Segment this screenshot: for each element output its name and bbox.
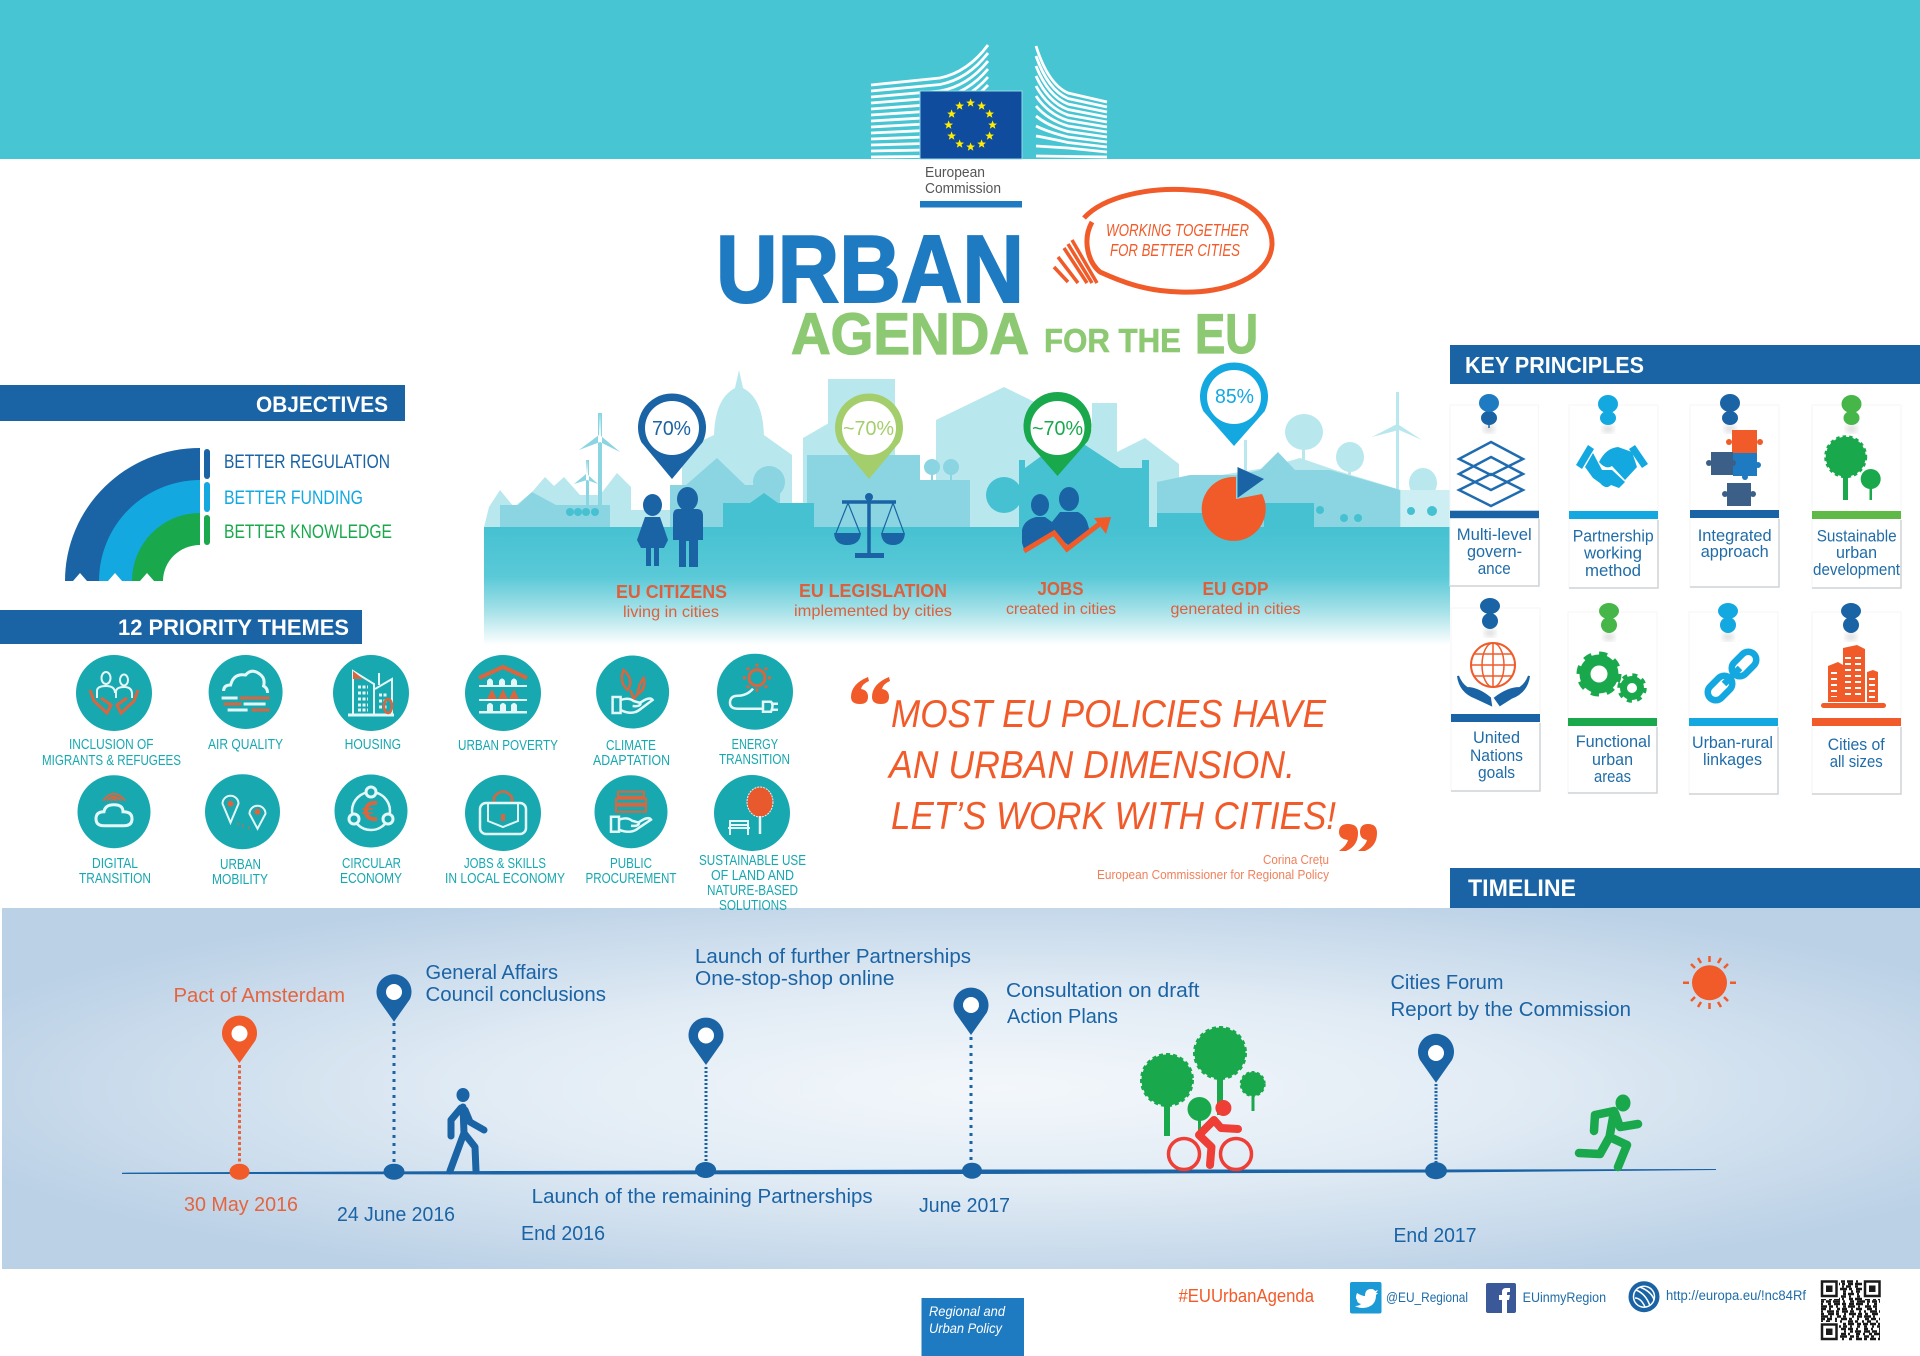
milestone: Pact of Amsterdam: 30 May 2016 bbox=[184, 1193, 298, 1216]
footer: website bbox=[1628, 1281, 1806, 1312]
panel: key principles bbox=[1450, 345, 1920, 794]
card: integrated approach: approach bbox=[1701, 542, 1769, 561]
stat: EU citizens bbox=[616, 393, 727, 621]
footer: facebook: EUinmyRegion bbox=[1523, 1289, 1606, 1305]
card: partnership working method: method bbox=[1585, 561, 1641, 580]
panel: priority themes bbox=[42, 654, 806, 914]
card: United Nations goals bbox=[1451, 598, 1540, 791]
theme: public procurement bbox=[586, 775, 677, 887]
card: functional urban areas: Functional bbox=[1576, 732, 1651, 751]
quote: LET’S WORK WITH CITIES! bbox=[891, 795, 1336, 838]
timeline chart bbox=[122, 945, 1736, 1247]
footer: Regional and Urban Policy tag bbox=[922, 1298, 1024, 1356]
card: multi-level governance bbox=[1450, 394, 1539, 586]
card: integrated approach bbox=[1690, 394, 1779, 587]
theme: air quality bbox=[208, 655, 283, 753]
milestone: partnerships bbox=[521, 945, 971, 1245]
theme: housing bbox=[333, 655, 409, 753]
theme: sustainable use of land: NATURE-BASED bbox=[707, 883, 798, 899]
theme: digital transition: TRANSITION bbox=[79, 871, 151, 887]
footer: QR code bbox=[1820, 1280, 1881, 1341]
heading: objectives: OBJECTIVES bbox=[256, 392, 388, 417]
milestone: consultation bbox=[919, 979, 1200, 1217]
theme: jobs and skills: IN LOCAL ECONOMY bbox=[445, 871, 565, 887]
card: cities of all sizes: all sizes bbox=[1830, 752, 1883, 771]
card: functional urban areas: urban bbox=[1592, 750, 1633, 769]
footer: website: http://europa.eu/!nc84Rf bbox=[1666, 1288, 1806, 1303]
callout: working together: WORKING TOGETHER bbox=[1106, 220, 1249, 240]
city skyline bbox=[484, 370, 1450, 645]
theme: digital transition bbox=[78, 775, 151, 887]
callout: working together: FOR BETTER CITIES bbox=[1110, 240, 1240, 260]
card: sustainable urban development: urban bbox=[1836, 543, 1877, 562]
stat: EU legislation bbox=[794, 393, 952, 620]
milestone: partnerships: Launch of further Partnerships bbox=[695, 945, 971, 968]
theme: jobs and skills bbox=[445, 775, 565, 887]
card: United Nations goals: goals bbox=[1478, 763, 1515, 782]
theme: urban poverty bbox=[458, 655, 558, 754]
card: sustainable urban development: Sustainable bbox=[1817, 527, 1897, 546]
panel: objectives bbox=[0, 385, 405, 581]
theme: urban poverty: URBAN POVERTY bbox=[458, 738, 558, 754]
milestone: partnerships: End 2016 bbox=[521, 1222, 605, 1245]
title: URBAN bbox=[716, 216, 1024, 323]
stat: EU GDP: EU GDP bbox=[1202, 578, 1268, 599]
quote: AN URBAN DIMENSION. bbox=[887, 744, 1295, 787]
theme: inclusion of migrants and refugees: MIGRANTS & REFUGEES bbox=[42, 753, 181, 769]
heading: timeline bbox=[1450, 868, 1920, 908]
icon: sun bbox=[1683, 956, 1736, 1009]
theme: energy transition: ENERGY bbox=[732, 737, 778, 753]
milestone: General Affairs: Council conclusions bbox=[426, 983, 606, 1006]
stat: EU legislation: EU LEGISLATION bbox=[799, 580, 947, 601]
milestone: consultation: Action Plans bbox=[1007, 1005, 1118, 1028]
theme: energy transition: TRANSITION bbox=[719, 752, 790, 768]
card: multi-level governance: ance bbox=[1478, 559, 1511, 578]
card: urban-rural linkages bbox=[1689, 603, 1778, 794]
card: integrated approach: Integrated bbox=[1698, 526, 1772, 545]
icon: walker bbox=[450, 1088, 484, 1171]
milestone: Pact of Amsterdam: Pact of Amsterdam bbox=[174, 984, 345, 1007]
theme: public procurement: PUBLIC bbox=[610, 856, 652, 872]
theme: climate adaptation bbox=[593, 656, 670, 769]
theme: urban mobility: URBAN bbox=[220, 857, 261, 873]
title: FOR THE bbox=[1044, 323, 1181, 360]
card: functional urban areas: areas bbox=[1594, 767, 1631, 786]
card: multi-level governance: Multi-level bbox=[1457, 525, 1532, 544]
timeline axis bbox=[122, 1169, 1716, 1174]
card: United Nations goals: United bbox=[1473, 728, 1520, 747]
objectives list: BETTER REGULATION bbox=[224, 452, 390, 473]
card: United Nations goals: Nations bbox=[1470, 746, 1523, 765]
heading: 12 priority themes bbox=[0, 610, 362, 644]
title bbox=[716, 216, 1258, 367]
card: cities of all sizes bbox=[1812, 603, 1901, 794]
footer: twitter bbox=[1350, 1282, 1468, 1314]
stat: EU legislation: ~70% bbox=[843, 418, 894, 440]
stat: EU GDP: 85% bbox=[1215, 386, 1254, 408]
heading: timeline: TIMELINE bbox=[1468, 875, 1576, 902]
quote bbox=[851, 677, 1377, 882]
stat: jobs: ~70% bbox=[1032, 418, 1083, 440]
theme: housing: HOUSING bbox=[345, 737, 401, 753]
theme: inclusion of migrants and refugees bbox=[42, 655, 181, 769]
heading: 12 priority themes: 12 PRIORITY THEMES bbox=[118, 615, 349, 640]
milestone: cities forum: Cities Forum bbox=[1390, 971, 1504, 994]
theme: circular economy bbox=[334, 774, 408, 887]
milestone: General Affairs: General Affairs bbox=[426, 961, 558, 984]
milestone: partnerships: Launch of the remaining Partnerships bbox=[532, 1185, 873, 1208]
theme: urban mobility bbox=[205, 774, 280, 888]
stat: EU legislation: implemented by cities bbox=[794, 603, 952, 620]
objectives list: BETTER FUNDING bbox=[224, 488, 363, 509]
footer: twitter: @EU_Regional bbox=[1386, 1289, 1468, 1305]
title: EU bbox=[1195, 302, 1258, 365]
stat: EU citizens: living in cities bbox=[623, 604, 719, 621]
logo: European Commission: European bbox=[925, 164, 985, 181]
chart: objectives rainbow bbox=[65, 448, 210, 581]
theme: circular economy: ECONOMY bbox=[340, 871, 402, 887]
panel: timeline background bbox=[2, 908, 1920, 1269]
footer: facebook bbox=[1486, 1283, 1606, 1313]
header band bbox=[0, 0, 1920, 159]
theme: digital transition: DIGITAL bbox=[92, 856, 138, 872]
milestone: Pact of Amsterdam bbox=[174, 984, 345, 1216]
card: partnership working method bbox=[1569, 395, 1658, 588]
card: functional urban areas bbox=[1568, 603, 1657, 793]
footer: Regional and Urban Policy tag: Regional and bbox=[929, 1303, 1006, 1319]
theme: energy transition bbox=[717, 654, 793, 768]
card: urban-rural linkages: linkages bbox=[1703, 750, 1762, 769]
theme: sustainable use of land: SOLUTIONS bbox=[719, 898, 787, 914]
card: partnership working method: Partnership bbox=[1573, 527, 1654, 546]
milestone: General Affairs bbox=[337, 961, 606, 1226]
card: sustainable urban development bbox=[1812, 395, 1901, 588]
theme: public procurement: PROCUREMENT bbox=[586, 871, 677, 887]
objectives list bbox=[224, 452, 392, 543]
card: multi-level governance: govern- bbox=[1467, 542, 1522, 561]
logo: European Commission bbox=[871, 45, 1107, 208]
theme: sustainable use of land: SUSTAINABLE USE bbox=[699, 853, 806, 869]
milestone: General Affairs: 24 June 2016 bbox=[337, 1203, 455, 1226]
objectives list: BETTER KNOWLEDGE bbox=[224, 522, 392, 543]
milestone: partnerships: One-stop-shop online bbox=[695, 967, 894, 990]
icon: trees and cyclist bbox=[1142, 1028, 1265, 1170]
card: cities of all sizes: Cities of bbox=[1828, 735, 1885, 754]
title: AGENDA bbox=[791, 302, 1029, 367]
callout: working together bbox=[1054, 189, 1272, 292]
theme: air quality: AIR QUALITY bbox=[208, 737, 283, 753]
theme: circular economy: CIRCULAR bbox=[342, 856, 401, 872]
stat: EU citizens: 70% bbox=[652, 418, 691, 440]
stat: jobs bbox=[1006, 392, 1116, 618]
milestone: cities forum: Report by the Commission bbox=[1390, 998, 1631, 1021]
stat: jobs: JOBS bbox=[1038, 578, 1084, 599]
stat: EU citizens: EU CITIZENS bbox=[616, 581, 727, 602]
heading: objectives bbox=[0, 385, 405, 421]
card: urban-rural linkages: Urban-rural bbox=[1692, 733, 1773, 752]
panel: city statistics bbox=[484, 362, 1450, 645]
theme: climate adaptation: ADAPTATION bbox=[593, 753, 670, 769]
theme: jobs and skills: JOBS & SKILLS bbox=[464, 856, 546, 872]
milestone: cities forum: End 2017 bbox=[1394, 1224, 1476, 1247]
theme: inclusion of migrants and refugees: INCLUSION OF bbox=[69, 737, 154, 753]
milestone: consultation: June 2017 bbox=[919, 1194, 1010, 1217]
stat: EU GDP: generated in cities bbox=[1170, 601, 1300, 618]
quote: MOST EU POLICIES HAVE bbox=[891, 693, 1327, 736]
footer: hashtag: #EUUrbanAgenda bbox=[1178, 1286, 1315, 1306]
milestone: cities forum bbox=[1390, 971, 1631, 1247]
theme: sustainable use of land: OF LAND AND bbox=[711, 868, 794, 884]
theme: climate adaptation: CLIMATE bbox=[606, 738, 656, 754]
milestone: consultation: Consultation on draft bbox=[1006, 979, 1200, 1002]
heading: key principles bbox=[1450, 345, 1920, 384]
theme: urban mobility: MOBILITY bbox=[212, 872, 268, 888]
heading: key principles: KEY PRINCIPLES bbox=[1465, 352, 1644, 378]
card: sustainable urban development: development bbox=[1813, 560, 1900, 579]
icon: runner bbox=[1579, 1094, 1638, 1167]
card: partnership working method: working bbox=[1583, 544, 1642, 562]
quote: European Commissioner for Regional Policy bbox=[1097, 867, 1329, 882]
theme: sustainable use of land bbox=[699, 775, 806, 914]
footer: Regional and Urban Policy tag: Urban Policy bbox=[929, 1320, 1003, 1336]
logo: European Commission: Commission bbox=[925, 180, 1001, 197]
stat: EU GDP bbox=[1170, 362, 1300, 618]
stat: jobs: created in cities bbox=[1006, 601, 1116, 618]
quote: Corina Crețu bbox=[1263, 852, 1329, 867]
